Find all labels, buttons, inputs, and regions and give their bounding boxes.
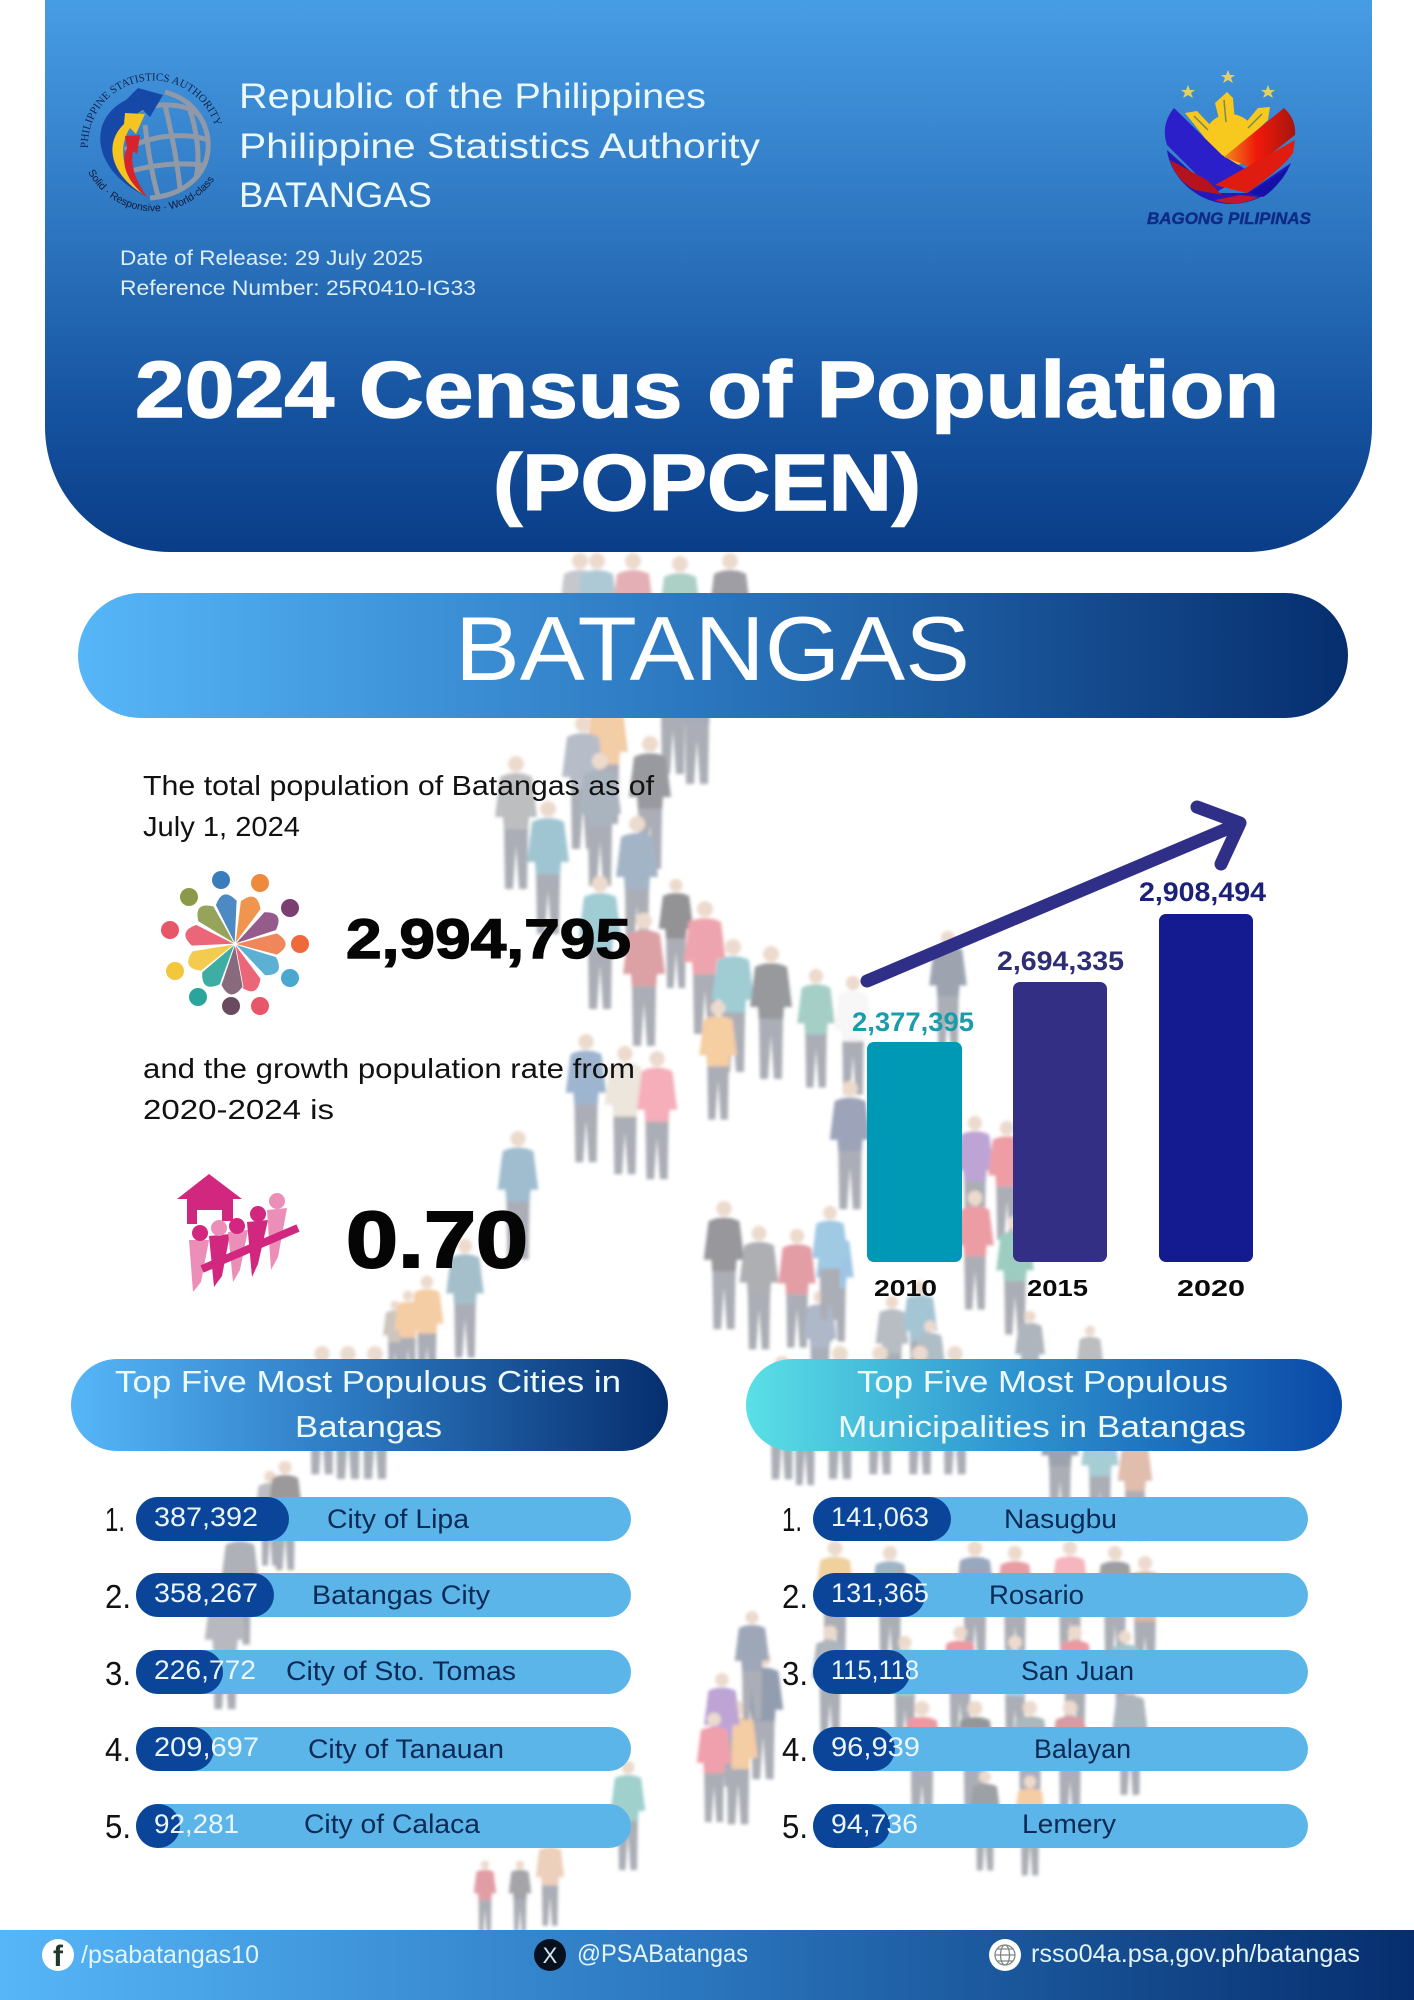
- row: Rosario: 131,365: [831, 1578, 929, 1608]
- panel: top five municipalities: [746, 1359, 1342, 1848]
- row: City of Calaca: 92,281: [154, 1809, 239, 1839]
- title: (POPCEN): [493, 438, 921, 527]
- bar 2015: [997, 946, 1124, 1301]
- row: Batangas City: [105, 1573, 631, 1617]
- heading: cities: [71, 1359, 668, 1451]
- row: Rosario: 2.: [782, 1578, 808, 1615]
- icon: Bagong Pilipinas logo: BAGONG PILIPINAS: [1147, 209, 1312, 228]
- row: City of Calaca: City of Calaca: [304, 1809, 481, 1839]
- row: San Juan: 115,118: [831, 1655, 919, 1685]
- arrow: upward trend: [867, 807, 1240, 981]
- agency name text: [239, 77, 761, 215]
- icon: PSA logo: [80, 73, 222, 212]
- row: Balayan: [782, 1727, 1308, 1771]
- row: Nasugbu: [782, 1497, 1308, 1541]
- text: total population intro: [143, 770, 654, 842]
- footer bar: [0, 1930, 1414, 2000]
- row: Balayan: Balayan: [1034, 1734, 1131, 1764]
- icon: Bagong Pilipinas logo: [1147, 70, 1312, 228]
- release information: Date of Release: 29 July 2025: [120, 246, 423, 270]
- row: Lemery: [782, 1804, 1308, 1848]
- icon: X: [534, 1939, 566, 1971]
- icon: circle of people: [161, 871, 309, 1015]
- text: growth rate intro: and the growth population rate from: [143, 1053, 635, 1084]
- row: City of Lipa: 1.: [105, 1501, 125, 1538]
- agency name text: BATANGAS: [239, 176, 432, 215]
- row: San Juan: San Juan: [1021, 1656, 1134, 1686]
- release information: Reference Number: 25R0410-IG33: [120, 276, 476, 300]
- row: City of Tanauan: [105, 1727, 631, 1771]
- row: City of Sto. Tomas: 3.: [105, 1655, 131, 1692]
- heading: municipalities: Municipalities in Batangas: [838, 1409, 1246, 1444]
- row: City of Tanauan: 4.: [105, 1731, 131, 1768]
- panel: top five cities: [71, 1359, 668, 1848]
- row: Lemery: 94,736: [831, 1809, 918, 1839]
- growth rate number: 0.70: [346, 1195, 528, 1284]
- agency name text: Philippine Statistics Authority: [239, 127, 761, 166]
- icon: Facebook: f: [53, 1940, 64, 1973]
- row: City of Tanauan: City of Tanauan: [308, 1734, 504, 1764]
- province banner: Batangas: [78, 593, 1348, 718]
- province banner: Batangas: BATANGAS: [455, 599, 970, 700]
- bar 2015: 2015: [1027, 1275, 1088, 1301]
- row: Nasugbu: 1.: [782, 1501, 802, 1538]
- header panel: [45, 0, 1372, 552]
- row: Nasugbu: 141,063: [831, 1502, 929, 1532]
- bar 2020: [1139, 877, 1266, 1301]
- row: Rosario: [782, 1573, 1308, 1617]
- icon: PSA logo: PHILIPPINE STATISTICS AUTHORITY: [80, 73, 222, 148]
- row: City of Sto. Tomas: City of Sto. Tomas: [286, 1656, 516, 1686]
- background crowd of people: [205, 553, 1164, 1932]
- release information: [120, 246, 476, 300]
- row: Lemery: Lemery: [1022, 1809, 1117, 1839]
- row: San Juan: 3.: [782, 1655, 808, 1692]
- row: Rosario: Rosario: [989, 1580, 1084, 1610]
- row: Batangas City: 358,267: [154, 1578, 258, 1608]
- bar chart: population by census year: [852, 807, 1266, 1301]
- heading: cities: Batangas: [295, 1409, 442, 1444]
- row: City of Tanauan: 209,697: [154, 1732, 259, 1762]
- bar 2010: 2010: [874, 1275, 937, 1301]
- row: Nasugbu: Nasugbu: [1004, 1504, 1117, 1534]
- row: Batangas City: 2.: [105, 1578, 131, 1615]
- row: Balayan: 4.: [782, 1731, 808, 1768]
- text: growth rate intro: [143, 1053, 635, 1125]
- row: Batangas City: Batangas City: [312, 1580, 491, 1610]
- X handle: @PSABatangas: [577, 1940, 748, 1968]
- title: 2024 Census of Population: [135, 345, 1279, 434]
- icon: PSA logo: Solid · Responsive · World-class: [88, 170, 214, 212]
- icon: people and house: [177, 1174, 298, 1292]
- bar 2020: 2020: [1177, 1275, 1245, 1301]
- bar 2010: 2,377,395: [852, 1007, 974, 1037]
- row: City of Sto. Tomas: [105, 1650, 631, 1694]
- title: [135, 345, 1279, 527]
- row: Balayan: 96,939: [831, 1732, 920, 1762]
- row: Lemery: 5.: [782, 1808, 808, 1845]
- heading: municipalities: Top Five Most Populous: [857, 1364, 1228, 1399]
- row: City of Sto. Tomas: 226,772: [154, 1655, 256, 1685]
- website address: rsso04a.psa,gov.ph/batangas: [1031, 1940, 1360, 1968]
- text: total population intro: July 1, 2024: [143, 811, 300, 842]
- bar 2020: 2,908,494: [1139, 877, 1266, 907]
- Facebook handle: /psabatangas10: [81, 1941, 259, 1969]
- agency name text: Republic of the Philippines: [239, 77, 706, 116]
- row: City of Lipa: City of Lipa: [327, 1504, 470, 1534]
- bar 2010: [852, 1007, 974, 1301]
- icon: Facebook: [42, 1939, 74, 1973]
- row: City of Calaca: [105, 1804, 631, 1848]
- row: City of Calaca: 5.: [105, 1808, 131, 1845]
- row: City of Lipa: 387,392: [154, 1502, 258, 1532]
- row: San Juan: [782, 1650, 1308, 1694]
- text: total population intro: The total population of Batangas as of: [143, 770, 654, 801]
- heading: cities: Top Five Most Populous Cities in: [115, 1364, 621, 1399]
- heading: municipalities: [746, 1359, 1342, 1451]
- icon: X: X: [543, 1943, 558, 1968]
- icon: website globe: [989, 1939, 1021, 1971]
- text: growth rate intro: 2020-2024 is: [143, 1094, 334, 1125]
- row: City of Lipa: [105, 1497, 631, 1541]
- bar 2015: 2,694,335: [997, 946, 1124, 976]
- total population number: 2,994,795: [346, 907, 631, 970]
